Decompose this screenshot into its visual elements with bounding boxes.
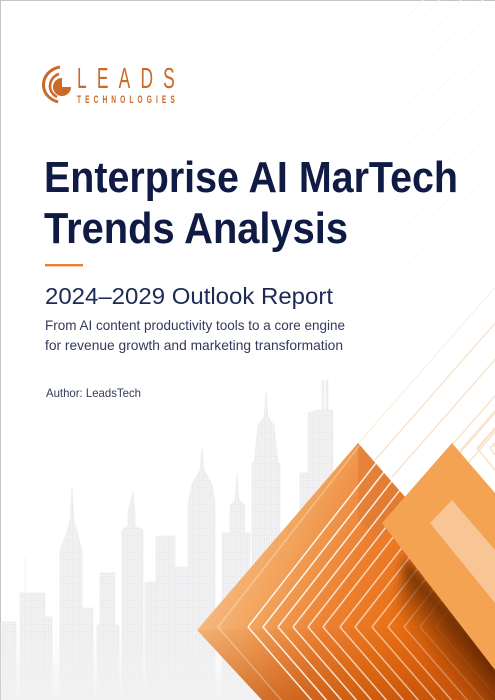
middle towers — [97, 492, 188, 700]
title: Enterprise AI MarTech — [44, 153, 458, 202]
right stepped tower — [222, 473, 250, 700]
author: Author: LeadsTech — [46, 386, 141, 400]
title — [44, 153, 458, 253]
chevron lines — [218, 422, 495, 700]
title: Trends Analysis — [44, 204, 348, 253]
logo — [44, 63, 175, 105]
logo tagline: TECHNOLOGIES — [77, 93, 175, 105]
description — [45, 317, 345, 353]
darker lower facet — [197, 627, 495, 700]
twin antenna tower — [300, 380, 333, 543]
main left tower — [60, 487, 93, 700]
large orange diamond with white chevrons — [197, 422, 495, 700]
city skyline illustration — [1, 380, 333, 700]
shaded facet at the apex — [358, 443, 410, 540]
subtitle: 2024–2029 Outlook Report — [45, 283, 333, 309]
pale inner facet — [430, 500, 495, 603]
far left buildings — [1, 557, 52, 700]
street haze — [1, 630, 271, 700]
thin orange chevron lines upper right — [358, 287, 495, 478]
small chevrons at right edge — [477, 428, 495, 470]
logo wordmark: LEADS — [77, 63, 175, 95]
faint diagonal stripes top right — [395, 0, 495, 280]
second orange diamond band — [382, 443, 495, 670]
description: for revenue growth and marketing transformation — [45, 337, 343, 353]
orange divider — [45, 264, 83, 266]
art deco tower — [252, 390, 280, 600]
dark shadow under the band — [395, 556, 495, 700]
central tall tower — [188, 447, 215, 700]
description: From AI content productivity tools to a core engine — [45, 317, 345, 333]
logo icon — [44, 67, 71, 102]
